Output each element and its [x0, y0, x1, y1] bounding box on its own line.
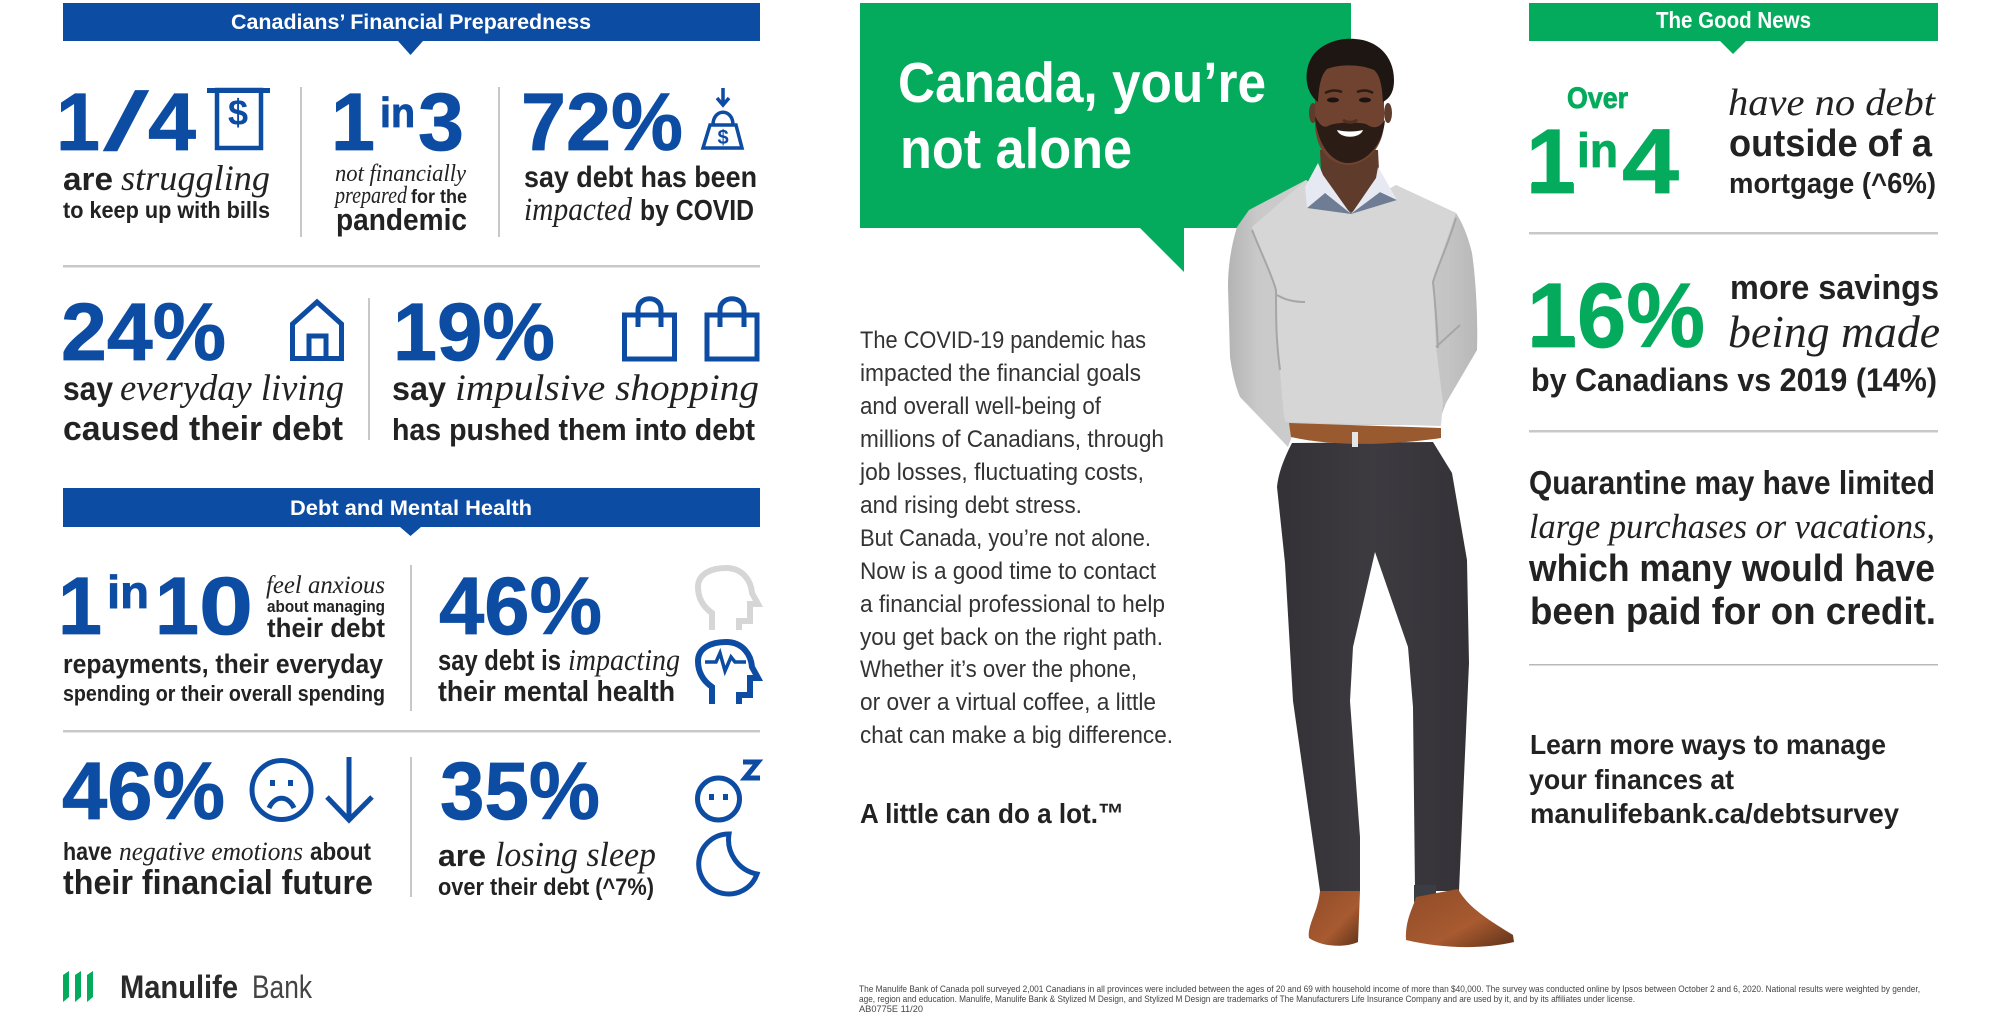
stat: 1 in 10 feel anxious: repayments, their everyday — [63, 649, 383, 679]
body text: and overall well-being of — [860, 393, 1101, 420]
stat: 1/4 struggling with bills: 4 — [148, 77, 196, 168]
stat: 35% losing sleep: over their debt (^7%) — [438, 874, 654, 901]
speech bubble headline: Canada, you're not alone: Canada, you’re — [898, 51, 1266, 115]
panel: Canadians' Financial Preparedness — [56, 3, 760, 448]
text block: quarantine: Quarantine may have limited — [1529, 464, 1935, 501]
stat: 1 in 3 not prepared — [331, 77, 467, 237]
panel: The Good News — [1526, 3, 1940, 829]
stat: 35% losing sleep: losing sleep — [495, 835, 656, 874]
body text: Whether it’s over the phone, — [860, 656, 1137, 683]
stat: 1/4 struggling with bills: struggling — [121, 158, 270, 198]
stat: 1 in 3 not prepared: in — [380, 89, 415, 136]
stat: 1/4 struggling with bills: are — [63, 161, 113, 197]
body text — [859, 327, 1173, 749]
stat: 1 in 10 feel anxious: 0 — [199, 561, 253, 652]
stat: 1 in 10 feel anxious — [58, 561, 385, 706]
stat: 24% everyday living: say — [63, 370, 114, 407]
icon: bill — [207, 88, 270, 148]
stat: over 1 in 4: 4 — [1622, 111, 1679, 213]
logo: Manulife Bank: Bank — [252, 969, 313, 1005]
icon: grey head — [698, 568, 758, 630]
panel: Debt and Mental Health — [58, 488, 760, 902]
stat: 19% impulsive shopping: 1 — [393, 287, 437, 378]
stat: 46% impacting mental health — [438, 561, 758, 708]
heading banner: Canadians' Financial Preparedness: Canadians’ Financial Preparedness — [231, 11, 591, 34]
neck — [1320, 150, 1380, 213]
icon: moon — [699, 834, 757, 894]
body text: But Canada, you’re not alone. — [860, 525, 1151, 552]
stat: 1 in 10 feel anxious: feel anxious — [266, 572, 385, 599]
stat: 72% impacted by COVID: say debt has been — [524, 161, 757, 194]
stat: over 1 in 4: 1 — [1526, 111, 1576, 213]
stat: 1/4 struggling with bills: to keep up with bills — [63, 197, 270, 223]
stat: over 1 in 4: outside of a — [1729, 123, 1933, 165]
body text: you get back on the right path. — [860, 624, 1163, 651]
body text: Now is a good time to contact — [860, 558, 1156, 585]
stat: 24% everyday living: everyday living — [120, 368, 344, 409]
stat: 16% more savings: being made — [1728, 307, 1940, 357]
footnote: age, region and education. Manulife, Manulife Bank & Stylized M Design, and Stylized M Design are trademarks of The Manufacturers Life Insurance Company and are used by it, and by its affiliates under license. — [859, 994, 1635, 1005]
stat: 16% more savings: by Canadians vs 2019 (14%) — [1531, 362, 1937, 398]
stat: 1 in 3 not prepared: not financially — [335, 161, 466, 187]
stat: 1/4 struggling with bills: 1 — [56, 77, 100, 168]
stat: over 1 in 4: mortgage (^6%) — [1729, 168, 1936, 200]
stat: 16% more savings — [1527, 265, 1940, 398]
stat: 1 in 10 feel anxious: their debt — [267, 613, 385, 643]
stat: 19% impulsive shopping: has pushed them into debt — [392, 412, 755, 447]
heading banner: Debt and Mental Health: Debt and Mental Health — [290, 497, 532, 520]
stat: 46% impacting mental health: impacting — [568, 642, 680, 677]
sweater torso — [1252, 180, 1456, 426]
socks — [1414, 885, 1436, 902]
stat: 24% everyday living: 24% — [61, 287, 226, 378]
stat: 1 in 10 feel anxious: 1 — [58, 561, 102, 652]
speech bubble headline: Canada, you're not alone: not alone — [900, 117, 1132, 181]
belt — [1289, 423, 1441, 447]
heading banner: Canadians' Financial Preparedness — [63, 3, 760, 55]
stat: 16% more savings: more savings — [1730, 269, 1939, 307]
body text: or over a virtual coffee, a little — [860, 689, 1156, 716]
stat: 46% negative emotions: about — [310, 838, 372, 866]
stat: 16% more savings: 6% — [1577, 265, 1705, 367]
stat: 46% impacting mental health: their mental health — [438, 676, 675, 708]
stat: 46% negative emotions — [62, 746, 373, 902]
hair — [1307, 39, 1394, 102]
right shoe — [1406, 889, 1514, 947]
photo illustration: smiling man — [1228, 39, 1514, 947]
body text: millions of Canadians, through — [860, 426, 1164, 453]
stat: 35% losing sleep: are — [438, 838, 486, 873]
stat: 24% everyday living — [61, 287, 344, 448]
call to action: Learn more ways to manage — [1530, 729, 1886, 760]
stat: 46% negative emotions: their financial future — [63, 864, 373, 902]
footnote: AB0775E 11/20 — [859, 1004, 923, 1015]
smile — [1337, 130, 1363, 137]
body text: a financial professional to help — [860, 591, 1165, 618]
text block: quarantine: large purchases or vacations, — [1529, 507, 1935, 546]
call to action: manulifebank.ca/debtsurvey — [1530, 798, 1899, 829]
stat: 46% impacting mental health: say debt is — [438, 645, 561, 677]
stat: 1/4 struggling with bills: / — [104, 77, 148, 168]
sweater — [1228, 180, 1477, 447]
stat: 19% impulsive shopping: say — [392, 370, 447, 407]
stat: 1 in 3 not prepared: pandemic — [336, 202, 467, 237]
icon: sleeping face — [698, 762, 760, 820]
icon: down arrow — [327, 757, 372, 820]
stat: 1 in 3 not prepared: 3 — [418, 77, 464, 168]
stat: 72% impacted by COVID: 72% — [521, 77, 683, 168]
text block: quarantine: been paid for on credit. — [1530, 591, 1936, 633]
logo: Manulife Bank: Manulife — [120, 969, 238, 1005]
heading banner: Debt and Mental Health — [63, 488, 760, 536]
speech bubble headline: Canada, you're not alone — [860, 3, 1351, 272]
tagline: A little can do a lot.™ — [860, 798, 1124, 829]
body text: and rising debt stress. — [860, 492, 1082, 519]
face — [1315, 62, 1384, 165]
stat: 1 in 10 feel anxious: about managing — [267, 597, 385, 616]
stat: 35% losing sleep — [438, 746, 760, 901]
stat: 46% negative emotions: 46% — [62, 746, 225, 837]
stat: over 1 in 4: have no debt — [1728, 82, 1937, 124]
stat: 1 in 3 not prepared: for the — [411, 187, 467, 208]
icon: bill: $ — [228, 92, 248, 133]
stat: 16% more savings: 1 — [1527, 265, 1577, 367]
stat: 24% everyday living: caused their debt — [63, 410, 343, 448]
stat: 46% negative emotions: have — [63, 838, 112, 866]
body text: The COVID-19 pandemic has — [860, 327, 1146, 354]
body text: job losses, fluctuating costs, — [859, 459, 1144, 486]
stat: 19% impulsive shopping: impulsive shopping — [455, 368, 759, 409]
icon: sad face — [252, 760, 311, 820]
stat: 35% losing sleep: 35% — [440, 746, 600, 837]
trousers — [1277, 442, 1469, 891]
stat: 1 in 10 feel anxious: spending or their overall spending — [63, 681, 385, 706]
icon: blue head with pulse — [698, 642, 758, 704]
stat: over 1 in 4: Over — [1567, 82, 1628, 115]
stat: 1 in 10 feel anxious: 1 — [155, 561, 199, 652]
icon: money bag with arrow: $ — [717, 127, 729, 149]
stat: 72% impacted by COVID: by COVID — [640, 195, 754, 227]
text block: quarantine: which many would have — [1528, 548, 1935, 590]
stat: 19% impulsive shopping: 9% — [437, 287, 555, 378]
stat: over 1 in 4: in — [1577, 125, 1618, 178]
heading banner: The Good News: The Good News — [1656, 7, 1811, 33]
beard — [1315, 116, 1385, 163]
stat: 1 in 3 not prepared: prepared — [333, 183, 408, 209]
footnote — [859, 984, 1920, 1015]
heading banner: The Good News — [1529, 3, 1938, 54]
stat: 19% impulsive shopping — [392, 287, 759, 447]
text block: quarantine — [1528, 464, 1936, 633]
stat: 46% impacting mental health: 46% — [439, 561, 602, 652]
stat: 46% negative emotions: negative emotions — [119, 837, 303, 866]
icon: shopping bags — [624, 299, 757, 359]
logo: Manulife Bank — [63, 969, 313, 1005]
stat: 72% impacted by COVID: impacted — [524, 192, 632, 228]
icon: house — [292, 302, 342, 358]
call to action: your finances at — [1529, 764, 1734, 795]
stat: 72% impacted by COVID — [521, 77, 757, 228]
call to action — [1529, 729, 1899, 829]
ears — [1309, 103, 1392, 123]
left shoe — [1309, 891, 1360, 946]
eyes and brows — [1325, 91, 1373, 122]
stat: 1 in 3 not prepared: 1 — [331, 77, 375, 168]
icon: money bag with arrow — [703, 88, 742, 149]
body text: impacted the financial goals — [860, 360, 1141, 387]
body text: chat can make a big difference. — [860, 722, 1173, 749]
collar — [1305, 163, 1397, 214]
stat: 1 in 10 feel anxious: in — [107, 566, 149, 618]
stat: over 1 in 4 — [1526, 82, 1937, 213]
stat: 1/4 struggling with bills — [56, 77, 270, 223]
